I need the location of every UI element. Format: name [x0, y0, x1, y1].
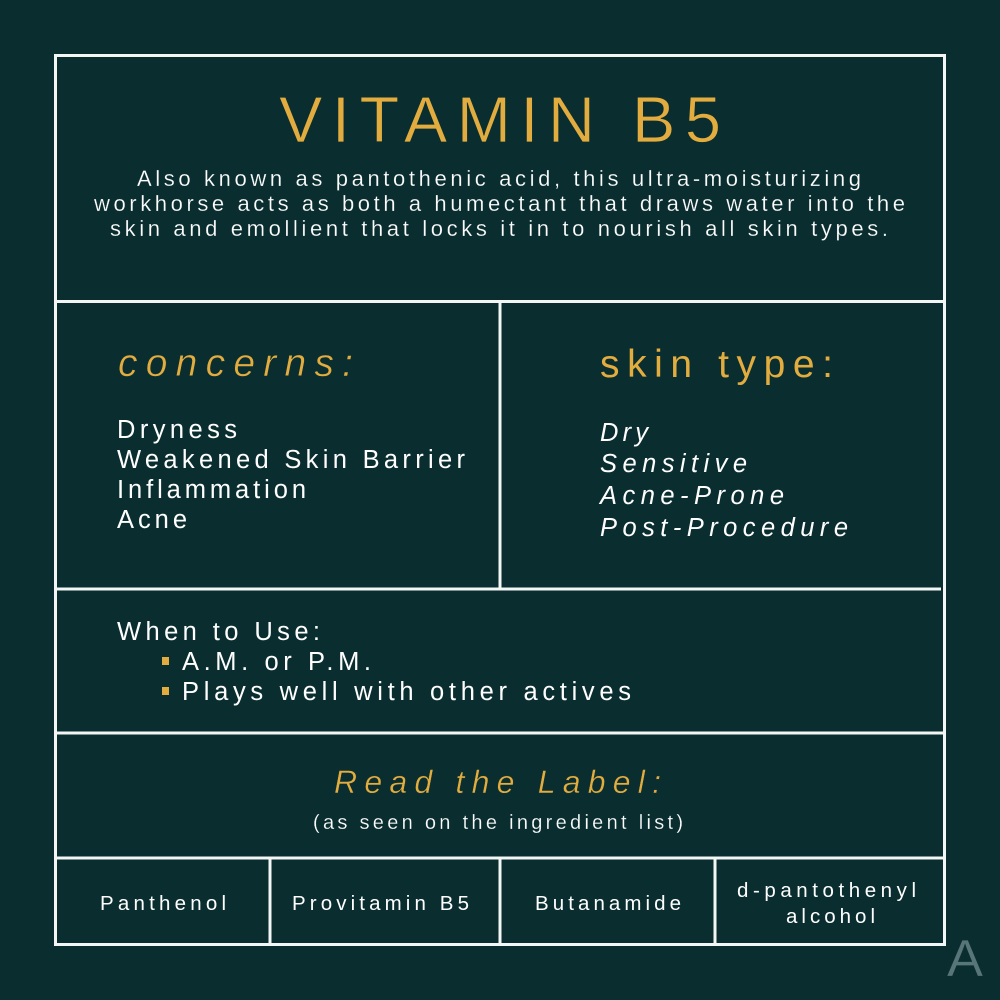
title: VITAMIN B5 — [279, 83, 721, 156]
ingredient: d-pantothenyl alcohol: d-pantothenyl — [737, 879, 916, 902]
concerns list — [117, 416, 466, 534]
skin type list: Post-Procedure — [600, 514, 848, 542]
concerns list: Inflammation — [117, 476, 306, 504]
description — [93, 166, 905, 241]
concerns list: Dryness — [117, 416, 237, 444]
ingredient: Butanamide: Butanamide — [535, 892, 681, 915]
ingredient: d-pantothenyl alcohol: alcohol — [786, 905, 875, 928]
description: workhorse acts as both a humectant that draws water into the — [93, 191, 905, 216]
panel: when to use — [117, 618, 631, 706]
watermark logo: A — [947, 930, 983, 988]
panel: read the label — [313, 764, 683, 834]
skin type list: Acne-Prone — [598, 482, 784, 510]
panel: skin type — [598, 343, 848, 542]
panel: concerns — [117, 342, 466, 534]
skin type list: Sensitive — [600, 450, 747, 478]
concerns list: Acne — [117, 506, 187, 534]
read the label heading: Read the Label: — [334, 764, 661, 800]
skin type list: Dry — [600, 419, 650, 447]
table frame and grid lines — [55, 56, 945, 945]
ingredient: Provitamin B5: Provitamin B5 — [292, 892, 469, 915]
skin type list — [598, 419, 848, 542]
when to use heading: When to Use: — [117, 618, 320, 646]
description: Also known as pantothenic acid, this ultra-moisturizing — [137, 166, 861, 191]
concerns list: Weakened Skin Barrier — [117, 446, 466, 474]
ingredient: Panthenol: Panthenol — [100, 892, 226, 915]
bullet: actives: Plays well with other actives — [182, 678, 631, 706]
bullet: time of day: A.M. or P.M. — [182, 648, 371, 676]
panel: ingredient names — [100, 879, 916, 928]
skin type heading: skin type: — [600, 343, 833, 386]
concerns heading: concerns: — [118, 342, 353, 385]
ingredient: d-pantothenyl alcohol — [737, 879, 916, 928]
panel: header — [93, 83, 905, 241]
description: skin and emollient that locks it in to nourish all skin types. — [110, 216, 888, 241]
read the label subheading: (as seen on the ingredient list) — [313, 812, 683, 834]
